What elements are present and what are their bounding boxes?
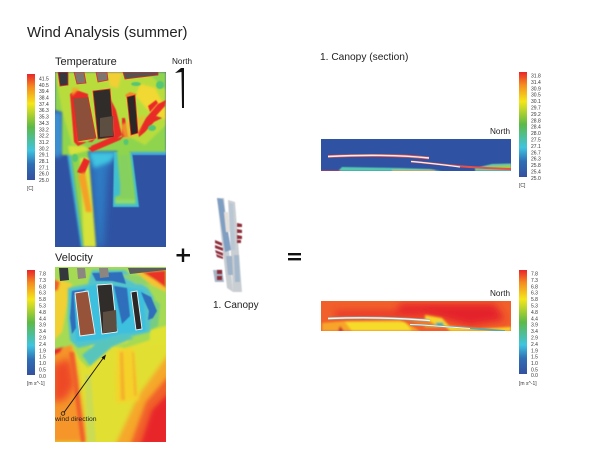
heading: canopy section: 1. Canopy (section) xyxy=(320,52,408,63)
colour legend: velocity map: 4.8 xyxy=(39,310,46,316)
colour legend: velocity section: 6.8 xyxy=(531,284,538,290)
fast wind zones xyxy=(55,344,166,442)
colour legend: velocity section: 2.4 xyxy=(531,342,538,348)
colour legend: temperature section: 30.5 xyxy=(531,93,541,99)
colour legend: velocity map: 5.8 xyxy=(39,297,46,303)
colour legend: velocity section: 7.8 xyxy=(531,272,538,278)
colour legend: temperature section: 25.8 xyxy=(531,163,541,169)
warm zone: cool halo xyxy=(52,112,166,247)
colour legend: temperature section: 30.9 xyxy=(531,86,541,92)
colour legend: temperature section: 26.3 xyxy=(531,157,541,163)
colour legend: temperature section: 31.8 xyxy=(531,74,541,80)
colour legend: velocity section: 5.8 xyxy=(531,297,538,303)
buildings xyxy=(58,72,158,141)
icon: north arrow: North xyxy=(172,57,192,66)
colour legend: velocity section: 1.0 xyxy=(531,361,538,367)
heading: temperature: Temperature xyxy=(55,56,117,68)
temperature map xyxy=(52,72,166,247)
velocity map xyxy=(55,267,166,442)
colour legend: temperature map: 34.3 xyxy=(39,121,49,127)
colour legend: velocity section: 7.3 xyxy=(531,278,538,284)
temperature section chart xyxy=(321,139,511,171)
colour legend: velocity map: 1.0 xyxy=(39,361,46,367)
colour legend: temperature section: 28.0 xyxy=(531,131,541,137)
colour legend: temperature map: 28.1 xyxy=(39,159,49,165)
colour legend: temperature section: 29.7 xyxy=(531,106,541,112)
colour legend: temperature section: 26.7 xyxy=(531,150,541,156)
label: canopy: 1. Canopy xyxy=(213,300,259,311)
label: north, velocity section: North xyxy=(490,289,510,298)
colour legend: velocity map: [m s^-1] xyxy=(27,381,45,387)
colour legend: velocity section: 3.9 xyxy=(531,323,538,329)
top-zone flow xyxy=(52,264,170,368)
colour legend: temperature section xyxy=(519,72,541,189)
colour legend: velocity map: 7.8 xyxy=(39,272,46,278)
colour legend: temperature section: 30.1 xyxy=(531,99,541,105)
icon: north arrow xyxy=(172,57,192,108)
colour legend: temperature map: 40.5 xyxy=(39,83,49,89)
colour legend: temperature section: 27.5 xyxy=(531,138,541,144)
warm zone: land and piers xyxy=(55,72,166,247)
colour legend: temperature map: 30.2 xyxy=(39,146,49,152)
colour legend: velocity section: 5.3 xyxy=(531,304,538,310)
title: Wind Analysis (summer) xyxy=(27,25,188,41)
cool patches xyxy=(72,81,164,162)
colour legend: temperature section: 28.8 xyxy=(531,118,541,124)
colour legend: temperature section: 28.4 xyxy=(531,125,541,131)
colour legend: velocity map: 3.4 xyxy=(39,329,46,335)
colour legend: temperature map: 39.4 xyxy=(39,89,49,95)
symbol: plus xyxy=(176,248,190,262)
colour legend: velocity map: 0.0 xyxy=(39,374,46,380)
colour legend: velocity section: 1.5 xyxy=(531,355,538,361)
colour legend: temperature map: 27.1 xyxy=(39,165,49,171)
colour legend: temperature map: [C] xyxy=(27,186,34,192)
symbol: equals xyxy=(288,253,301,260)
colour legend: velocity section: 3.4 xyxy=(531,329,538,335)
colour legend: velocity section xyxy=(519,270,538,387)
colour legend: velocity map: 4.4 xyxy=(39,316,46,322)
colour legend: temperature map: 29.1 xyxy=(39,153,49,159)
colour legend: velocity map: 2.4 xyxy=(39,342,46,348)
colour legend: temperature map: 41.5 xyxy=(39,76,49,82)
colour legend: temperature map: 35.3 xyxy=(39,115,49,121)
colour legend: velocity map: 0.5 xyxy=(39,368,46,374)
colour legend: velocity section: 4.4 xyxy=(531,316,538,322)
colour legend: temperature map: 26.0 xyxy=(39,172,49,178)
colour legend: velocity map: 7.3 xyxy=(39,278,46,284)
colour legend: velocity map xyxy=(27,270,46,387)
colour legend: temperature map: 36.3 xyxy=(39,108,49,114)
colour legend: temperature map: 33.2 xyxy=(39,127,49,133)
colour legend: temperature section: 27.1 xyxy=(531,144,541,150)
warm streaks xyxy=(72,88,145,212)
colour legend: velocity map: 2.9 xyxy=(39,336,46,342)
colour legend: temperature map xyxy=(27,74,49,192)
colour legend: velocity map: 6.8 xyxy=(39,284,46,290)
colour legend: temperature map: 32.2 xyxy=(39,134,49,140)
colour legend: velocity section: 2.9 xyxy=(531,336,538,342)
colour legend: velocity section: 1.9 xyxy=(531,348,538,354)
colour legend: velocity map: 6.3 xyxy=(39,291,46,297)
colour legend: velocity section: 4.8 xyxy=(531,310,538,316)
colour legend: velocity map: 5.3 xyxy=(39,304,46,310)
colour legend: temperature map: 31.2 xyxy=(39,140,49,146)
slow wind zones xyxy=(68,270,160,366)
colour legend: temperature map: 25.0 xyxy=(39,178,49,184)
colour legend: velocity section: 0.0 xyxy=(531,373,538,379)
colour legend: velocity map: 3.9 xyxy=(39,323,46,329)
colour legend: temperature map: 37.4 xyxy=(39,102,49,108)
colour legend: velocity section: 0.5 xyxy=(531,368,538,374)
heading: velocity: Velocity xyxy=(55,252,93,264)
arrow: wind direction: wind direction xyxy=(54,416,97,423)
arrow: wind direction xyxy=(54,354,106,423)
colour legend: temperature section: 31.4 xyxy=(531,80,541,86)
colour legend: temperature section: 25.0 xyxy=(531,176,541,182)
colour legend: temperature section: 25.4 xyxy=(531,170,541,176)
colour legend: velocity section: [m s^-1] xyxy=(519,381,537,387)
hot zones xyxy=(70,90,166,175)
colour legend: temperature section: [C] xyxy=(519,183,526,189)
label: north, temperature section: North xyxy=(490,127,510,136)
buildings xyxy=(59,268,166,336)
colour legend: temperature section: 29.2 xyxy=(531,112,541,118)
colour legend: velocity map: 1.5 xyxy=(39,355,46,361)
colour legend: temperature map: 38.4 xyxy=(39,96,49,102)
velocity section chart xyxy=(321,301,511,331)
colour legend: velocity section: 6.3 xyxy=(531,291,538,297)
colour legend: velocity map: 1.9 xyxy=(39,348,46,354)
icon: canopy model xyxy=(213,198,242,292)
